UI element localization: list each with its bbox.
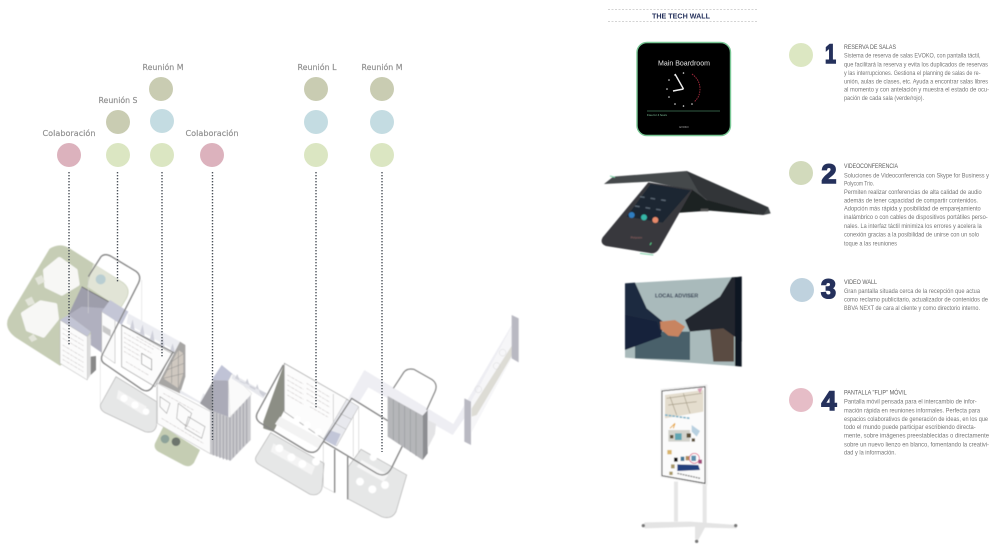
zone: Colaboración left: Colaboración xyxy=(42,128,96,138)
pale circulation band xyxy=(348,325,517,435)
small green pad with dots xyxy=(155,427,200,466)
text: video wall xyxy=(844,279,988,312)
text: reserva de salas xyxy=(844,44,989,102)
meeting room S floor and furniture xyxy=(88,275,157,432)
text: pantalla flip movil: Pantalla móvil pensada para el intercambio de infor- xyxy=(844,399,977,406)
text: videoconferencia: además de tener capacidad de compartir contenidos. xyxy=(844,197,978,204)
central access column xyxy=(323,399,359,499)
number 2: 2 xyxy=(822,159,836,189)
dotted leader lines xyxy=(69,172,382,452)
device: video wall screen xyxy=(625,277,742,367)
toothed partition strip xyxy=(122,313,180,353)
item 1: reserva de salas xyxy=(789,39,989,102)
tall striped cabinet xyxy=(388,369,436,460)
zone: Reunión M right: Reunión M xyxy=(362,62,402,72)
axonometric floor plan: right section xyxy=(255,315,519,518)
zone: Colaboración right xyxy=(186,128,238,167)
meeting room L floor xyxy=(255,433,324,495)
device: video wall screen: LOCAL ADVISER xyxy=(655,293,698,299)
text: videoconferencia: VIDEOCONFERENCIA xyxy=(844,163,899,170)
number 1: 1 xyxy=(825,39,836,69)
textured dark wall xyxy=(263,363,284,432)
zone: Reunión M right xyxy=(362,62,402,167)
violet partition wall xyxy=(68,287,112,353)
text: pantalla flip movil: PANTALLA "FLIP" MÓVIL xyxy=(844,388,907,397)
marker circle 3 xyxy=(790,278,814,302)
heading: the tech wall xyxy=(608,10,757,22)
marker circle 4 xyxy=(789,388,813,412)
meeting room M floor xyxy=(348,449,407,518)
number 3: 3 xyxy=(821,274,836,304)
zone: Colaboración right: Colaboración xyxy=(186,128,238,138)
text: videoconferencia xyxy=(844,163,990,248)
curved curtain column xyxy=(200,365,267,461)
text: pantalla flip movil xyxy=(844,388,989,457)
marker circle 1 xyxy=(789,43,813,67)
green lounge pad xyxy=(8,246,128,365)
white note wall xyxy=(102,300,172,387)
zone: Reunión L xyxy=(298,62,337,167)
text: pantalla flip movil: dad y la información. xyxy=(844,450,896,457)
text wall in room L xyxy=(275,363,348,448)
item 3: video wall xyxy=(790,274,988,312)
zone: Reunión S xyxy=(98,95,138,167)
marker circle 2 xyxy=(789,161,813,185)
text: reserva de salas: RESERVA DE SALAS xyxy=(844,44,896,51)
item 4: pantalla flip movil xyxy=(789,386,989,457)
upper frames of rooms L and M xyxy=(256,365,405,475)
zone: Colaboración left xyxy=(42,128,96,167)
device: Evoko room booking panel: Main Boardroom xyxy=(658,60,710,68)
zone: Reunión M centre: Reunión M xyxy=(142,62,184,72)
number 4: 4 xyxy=(822,386,836,416)
upper frame of meeting room S xyxy=(88,255,173,391)
text: videoconferencia: Adopción más rápida y posibilidad de emparejamiento xyxy=(844,206,981,213)
far end wall with bench xyxy=(464,315,519,445)
wall with sketches xyxy=(157,383,213,454)
zone: Reunión S: Reunión S xyxy=(98,95,138,105)
front white wall with notes xyxy=(60,315,96,380)
text: video wall: VIDEO WALL xyxy=(844,279,877,286)
device: Evoko room booking panel: EVOKO xyxy=(679,125,689,129)
text: videoconferencia: toque a las reuniones xyxy=(844,241,898,248)
zone: Reunión L: Reunión L xyxy=(298,62,337,72)
device: Polycom Trio conference phone: Polycom xyxy=(631,236,643,240)
text: videoconferencia: Polycom Trio. xyxy=(844,181,874,188)
device: Evoko room booking panel: Free for 4 hours xyxy=(647,113,667,117)
text: videoconferencia: conexión gracias a la posibilidad de unirse con un solo xyxy=(844,232,979,239)
zone: Reunión M centre xyxy=(142,62,184,167)
axonometric floor plan: left section xyxy=(8,246,267,466)
item 2: videoconferencia xyxy=(789,159,990,248)
text: pantalla flip movil: mación rápida en reuniones informales. Perfecta para xyxy=(844,407,980,414)
device: flip mobile whiteboard on stand xyxy=(642,384,737,543)
heading: the tech wall: THE TECH WALL xyxy=(652,11,710,20)
text: pantalla flip movil: todo el mundo puede participar escribiendo directa- xyxy=(844,424,976,431)
text: video wall: Gran pantalla situada cerca de la recepción que actua xyxy=(844,288,980,295)
text: reserva de salas: pación de cada sala (verde/rojo). xyxy=(844,95,924,102)
device: Polycom Trio conference phone xyxy=(602,171,771,255)
device: Evoko room booking panel xyxy=(637,42,730,136)
shelving unit xyxy=(158,342,185,393)
